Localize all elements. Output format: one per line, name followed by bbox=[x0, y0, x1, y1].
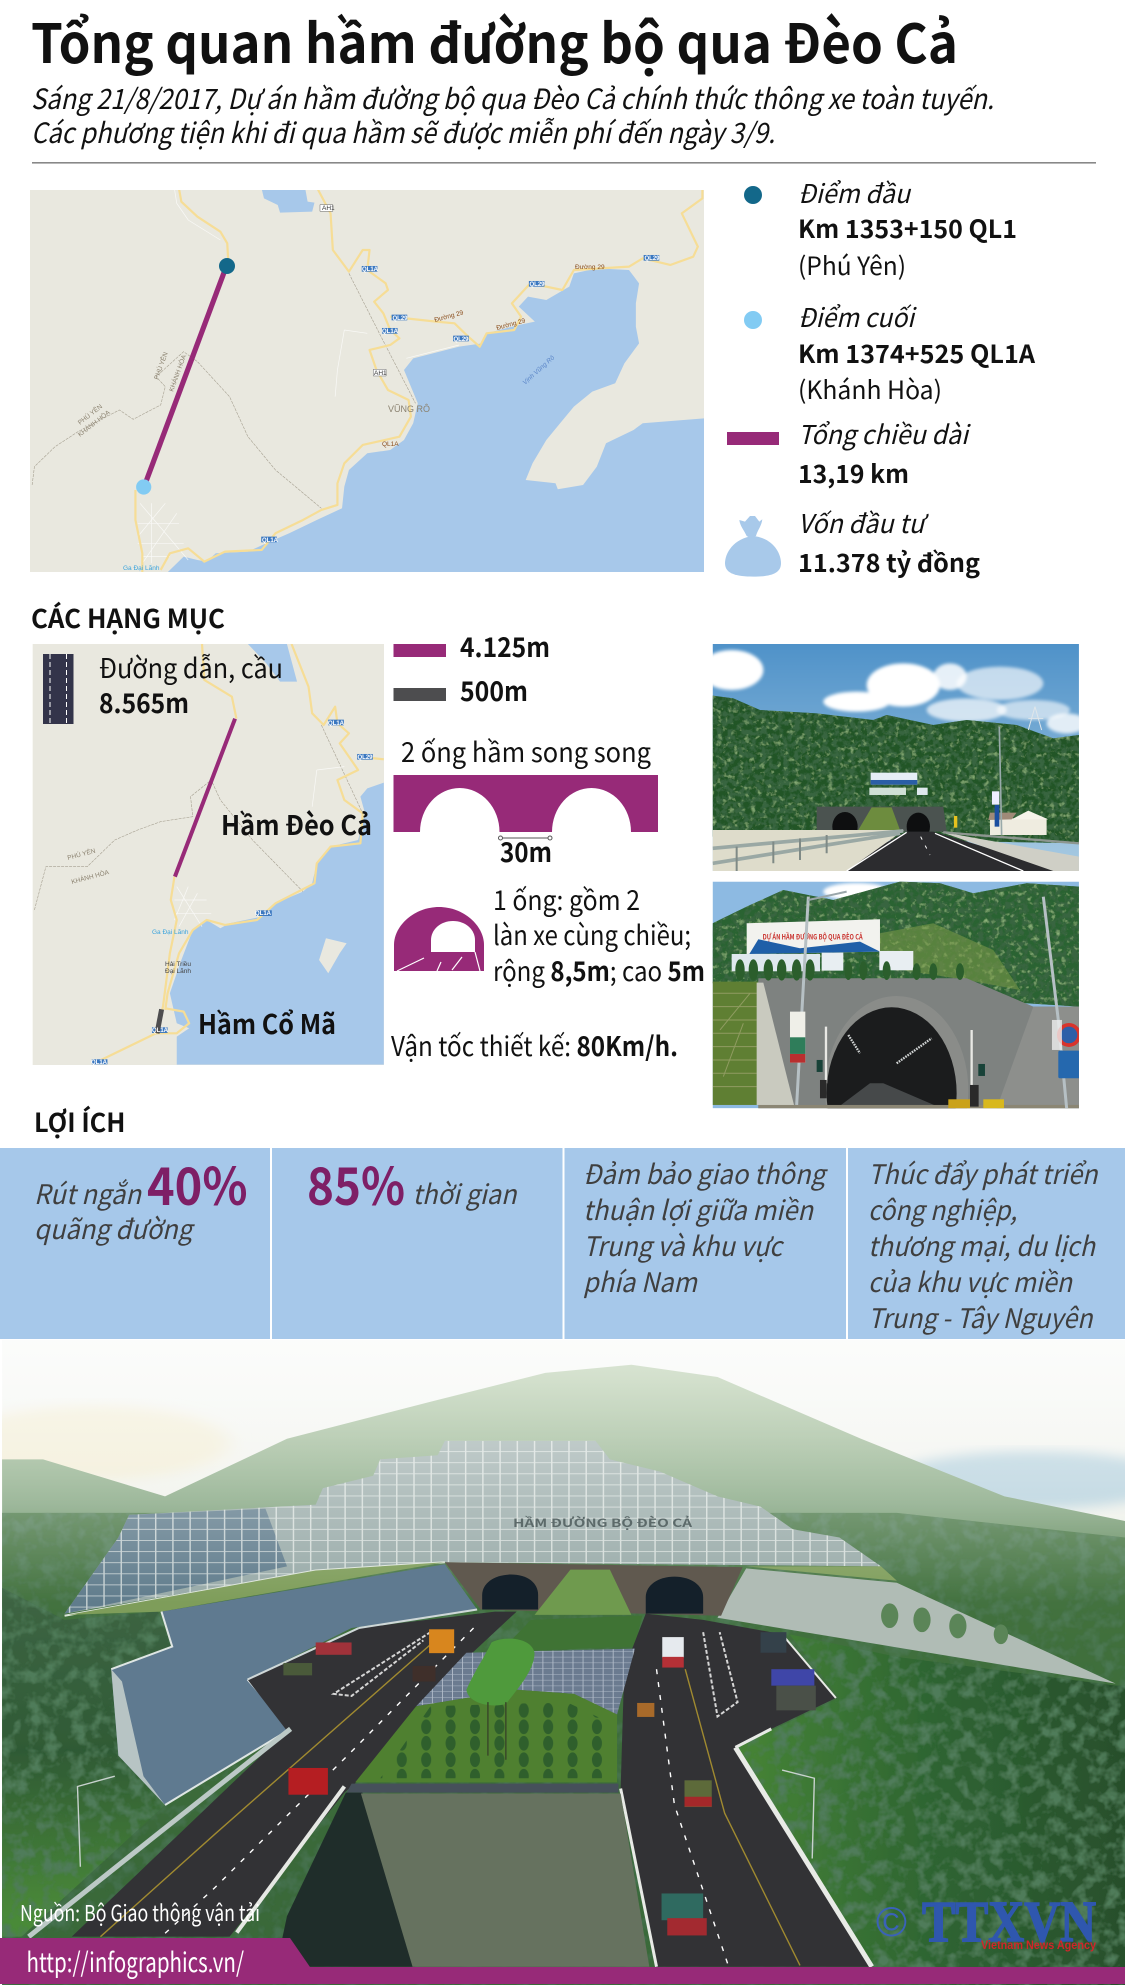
road details bbox=[29, 1610, 872, 1967]
house bbox=[990, 818, 1047, 835]
tube description: làn xe cùng chiều; bbox=[493, 914, 691, 953]
icon: start point bbox=[219, 258, 235, 274]
legend: purple 4.125m: 4.125m bbox=[460, 626, 550, 665]
start point text: Điểm đầu bbox=[798, 174, 911, 211]
intro text bbox=[31, 78, 994, 152]
logo: TTXVN: Vietnam News Agency bbox=[981, 1938, 1096, 1952]
map labels: KHÁNH HÒA bbox=[76, 407, 112, 439]
map labels: PHÚ YÊN bbox=[76, 402, 104, 427]
map labels: Đường 29 bbox=[575, 264, 605, 271]
benefit: traffic: thuận lợi giữa miền bbox=[583, 1189, 814, 1228]
legend: grey 500m bbox=[394, 670, 528, 709]
map labels: QL1A bbox=[255, 911, 272, 917]
benefit: time: thời gian bbox=[412, 1173, 518, 1212]
end point text bbox=[798, 298, 1036, 407]
map labels: PHÚ YÊN bbox=[151, 350, 170, 381]
start point text: Km 1353+150 QL1 bbox=[798, 210, 1017, 246]
intro text: Các phương tiện khi đi qua hầm sẽ được miễn phí đến ngày 3/9. bbox=[31, 112, 775, 152]
label: Đèo Cả tunnel: Hầm Đèo Cả bbox=[221, 804, 372, 843]
grass ledge bbox=[68, 1562, 897, 1615]
paved median bbox=[416, 1649, 635, 1714]
map labels: Đường 29 bbox=[434, 309, 464, 324]
tunnel Đèo Cả line bbox=[175, 719, 235, 877]
icon: start dot bbox=[744, 186, 762, 204]
right wall bbox=[718, 1568, 1116, 1684]
benefit: distance bbox=[34, 1145, 248, 1247]
upper median bbox=[535, 1570, 631, 1615]
design speed: Vận tốc thiết kế: 80Km/h. bbox=[391, 1025, 678, 1064]
photo: tunnel entrance wide view bbox=[700, 644, 1087, 871]
approach road text: 8.565m bbox=[99, 682, 189, 721]
benefit: distance: 40% bbox=[147, 1145, 248, 1220]
total length text bbox=[798, 415, 972, 491]
tube description: 1 ống: gồm 2 bbox=[493, 879, 640, 918]
fog layer bbox=[2, 1340, 1125, 1603]
benefit: development: thương mại, du lịch bbox=[868, 1225, 1096, 1264]
illustration: tunnel rendering bbox=[0, 1339, 1125, 1985]
photo: tunnel portal close-up bbox=[712, 882, 1079, 1108]
start point text: (Phú Yên) bbox=[798, 247, 906, 283]
benefit: time bbox=[307, 1145, 518, 1220]
map labels: QL29 bbox=[529, 282, 545, 288]
start point text bbox=[798, 174, 1017, 283]
map labels: Vịnh Vũng Rô bbox=[522, 354, 556, 386]
source note: Nguồn: Bộ Giao thông vận tải bbox=[20, 1896, 260, 1928]
photo: tunnel portal close-up: DỰ ÁN HẦM ĐƯỜNG BỘ QUA ĐÈO CẢ bbox=[763, 930, 863, 942]
map labels: QL1A bbox=[262, 538, 279, 544]
concrete wall bbox=[758, 978, 1079, 1108]
benefit: traffic: Trung và khu vực bbox=[583, 1225, 785, 1264]
heading: components: CÁC HẠNG MỤC bbox=[31, 599, 225, 636]
end point text: Điểm cuối bbox=[798, 298, 918, 335]
portal stone bbox=[445, 1562, 743, 1616]
logo: TTXVN bbox=[876, 1889, 1096, 1954]
lamp posts bbox=[77, 1770, 814, 1867]
map labels: KHÁNH HÒA bbox=[166, 353, 188, 393]
tube description: rộng 8,5m; cao 5m bbox=[493, 950, 705, 989]
right forest bbox=[735, 1634, 1125, 1985]
shields bbox=[261, 255, 659, 542]
water bbox=[170, 644, 384, 1065]
map labels bbox=[66, 721, 373, 1066]
dimension: 30m: 30m bbox=[500, 831, 552, 870]
benefit: development: Thúc đẩy phát triển bbox=[868, 1153, 1099, 1192]
benefit: development: công nghiệp, bbox=[868, 1189, 1017, 1228]
heading: benefits: LỢI ÍCH bbox=[34, 1103, 126, 1140]
intro text: Sáng 21/8/2017, Dự án hầm đường bộ qua Đèo Cả chính thức thông xe toàn tuyến. bbox=[31, 78, 994, 118]
benefit: time: 85% bbox=[307, 1145, 405, 1220]
map labels: AH1 bbox=[374, 370, 387, 377]
legend: purple 4.125m bbox=[394, 626, 550, 665]
lower block bbox=[276, 1793, 415, 1967]
billboard bbox=[747, 919, 880, 954]
tower bbox=[1028, 707, 1043, 730]
end point text: Km 1374+525 QL1A bbox=[798, 335, 1036, 371]
left foreground bbox=[0, 1587, 172, 1937]
tube description bbox=[493, 879, 705, 989]
map labels: PHÚ YÊN bbox=[66, 846, 97, 862]
map labels: QL1A bbox=[382, 441, 399, 448]
billboards bbox=[871, 773, 917, 785]
garden median bbox=[355, 1690, 617, 1782]
palms bbox=[881, 1603, 1008, 1644]
icon: end dot bbox=[744, 311, 762, 329]
poles and signs bbox=[797, 897, 1067, 1108]
total length text: Tổng chiều dài bbox=[798, 415, 972, 452]
map labels: QL1A bbox=[382, 329, 399, 335]
benefit: traffic bbox=[583, 1153, 829, 1300]
benefit: development: của khu vực miền bbox=[868, 1261, 1073, 1300]
map labels: QL1A bbox=[152, 1028, 169, 1034]
diagram: twin tunnels bbox=[394, 775, 658, 832]
panel: tunnel specs bbox=[391, 626, 705, 1064]
map labels: QL29 bbox=[392, 316, 408, 322]
two tubes heading: 2 ống hầm song song bbox=[401, 731, 651, 770]
icon: money bag bbox=[725, 516, 781, 577]
investment text: 11.378 tỷ đồng bbox=[798, 544, 980, 580]
retaining wall bbox=[111, 1564, 477, 1805]
legend: grey 500m: 500m bbox=[460, 670, 528, 709]
benefit: distance: quãng đường bbox=[34, 1208, 196, 1247]
map labels: QL29 bbox=[357, 755, 373, 761]
water: Vũng Rô bay bbox=[168, 189, 704, 572]
map labels: Ga Đại Lãnh bbox=[123, 565, 160, 572]
map labels: QL1A bbox=[91, 1060, 108, 1066]
vehicles bbox=[283, 1629, 816, 1935]
icon: length bar bbox=[727, 432, 779, 445]
label: Cổ Mã tunnel: Hầm Cổ Mã bbox=[198, 1003, 336, 1042]
icon: road bbox=[43, 654, 74, 724]
panel: route map bbox=[33, 644, 384, 1066]
grid slope bbox=[65, 1441, 881, 1614]
map labels: Đại Lãnh bbox=[165, 968, 191, 975]
logo: TTXVN: TTXVN bbox=[922, 1889, 1096, 1954]
benefit: distance: Rút ngắn bbox=[34, 1173, 142, 1212]
mountain bbox=[0, 1365, 1125, 1985]
benefit: traffic: phía Nam bbox=[583, 1261, 698, 1300]
benefit: traffic: Đảm bảo giao thông bbox=[583, 1153, 829, 1192]
tunnel Cổ Mã line bbox=[157, 1009, 162, 1033]
left road bbox=[72, 1612, 517, 1937]
panel: benefits bbox=[0, 1145, 1125, 1339]
tunnel name on slope: HẦM ĐƯỜNG BỘ ĐÈO CẢ bbox=[513, 1515, 693, 1531]
title: Tổng quan hầm đường bộ qua Đèo Cả bbox=[31, 0, 958, 79]
map labels: QL1A bbox=[362, 267, 379, 273]
panel: overview map bbox=[30, 189, 704, 572]
benefit: development bbox=[868, 1153, 1099, 1336]
route line bbox=[146, 270, 225, 482]
map labels bbox=[76, 205, 660, 572]
map labels: Đường 29 bbox=[496, 317, 526, 332]
logo: TTXVN: © bbox=[876, 1898, 907, 1945]
green slope bbox=[713, 982, 758, 1105]
road bbox=[848, 832, 1054, 871]
right road bbox=[621, 1614, 872, 1967]
footer band: http://infographics.vn/ bbox=[26, 1941, 244, 1980]
benefit: development: Trung - Tây Nguyên bbox=[868, 1297, 1094, 1336]
approach road text bbox=[99, 647, 283, 721]
panel: legend bbox=[725, 174, 1036, 580]
investment text: Vốn đầu tư bbox=[798, 504, 929, 541]
map labels: KHÁNH HÒA bbox=[70, 867, 110, 886]
end point text: (Khánh Hòa) bbox=[798, 371, 942, 407]
roads bbox=[135, 189, 702, 572]
footer band bbox=[0, 1938, 1125, 1984]
icon: end point bbox=[136, 479, 151, 495]
map labels: VŨNG RÔ bbox=[388, 404, 430, 414]
approach road text: Đường dẫn, cầu bbox=[99, 647, 283, 686]
map labels: AH1 bbox=[322, 205, 335, 212]
map labels: QL1A bbox=[328, 721, 345, 727]
map labels: Ga Đại Lãnh bbox=[152, 929, 189, 936]
icon: tube cross-section bbox=[394, 907, 484, 971]
map labels: QL29 bbox=[644, 256, 660, 262]
portal bbox=[817, 807, 947, 832]
map labels: Hải Triều bbox=[165, 959, 191, 968]
total length text: 13,19 km bbox=[798, 455, 909, 491]
investment text bbox=[798, 504, 980, 580]
map labels: QL29 bbox=[453, 337, 469, 343]
